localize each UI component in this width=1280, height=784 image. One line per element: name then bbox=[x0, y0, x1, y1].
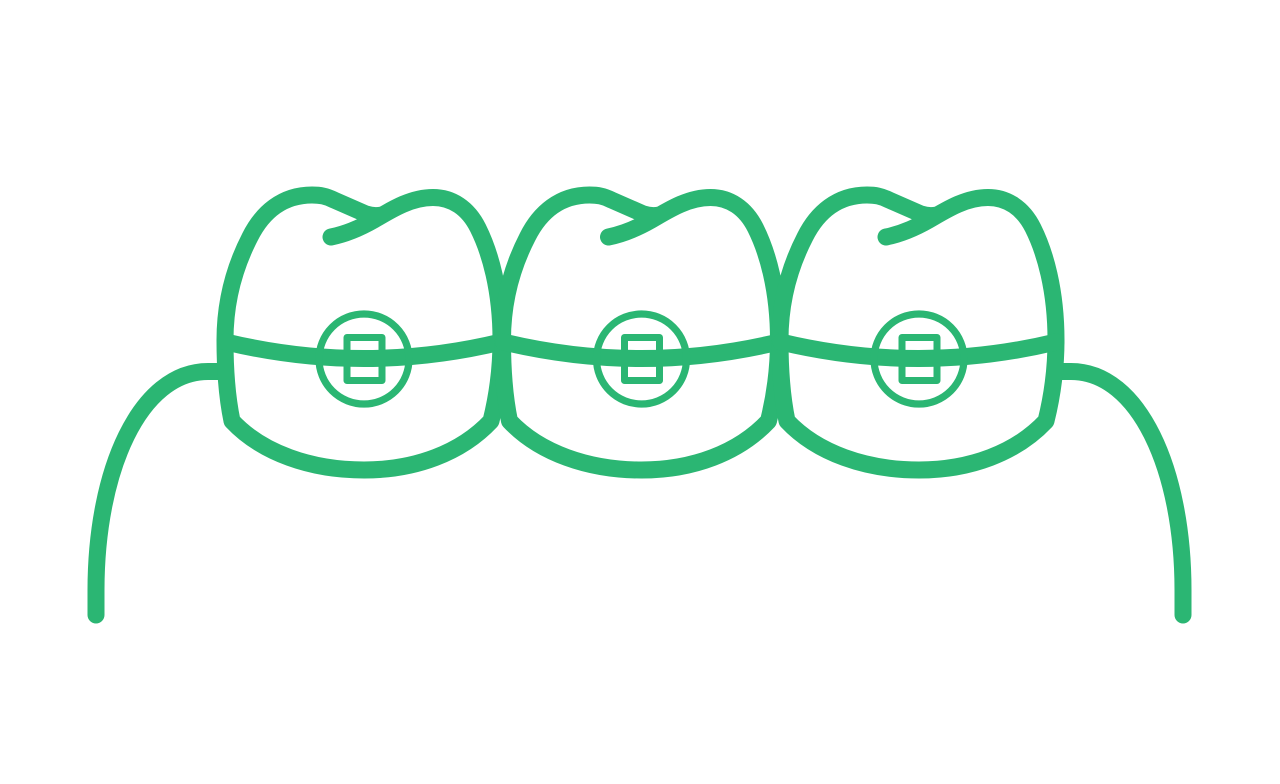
bracket ring bbox=[874, 314, 964, 404]
tooth outline bbox=[780, 195, 1056, 470]
wire end: right curve bbox=[1061, 372, 1183, 615]
tooth 1 with bracket bbox=[225, 195, 501, 470]
archwire bbox=[226, 342, 501, 358]
tooth 3 with bracket bbox=[780, 195, 1056, 470]
bracket ring bbox=[319, 314, 409, 404]
bracket square bbox=[902, 338, 937, 380]
wire end: left curve bbox=[96, 372, 218, 615]
bracket square bbox=[347, 338, 382, 380]
archwire bbox=[504, 342, 778, 358]
tooth outline bbox=[225, 195, 501, 470]
bracket ring bbox=[596, 314, 686, 404]
tooth 2 with bracket bbox=[502, 195, 778, 470]
bracket square bbox=[624, 338, 660, 380]
tooth outline bbox=[502, 195, 778, 470]
archwire bbox=[781, 342, 1056, 358]
